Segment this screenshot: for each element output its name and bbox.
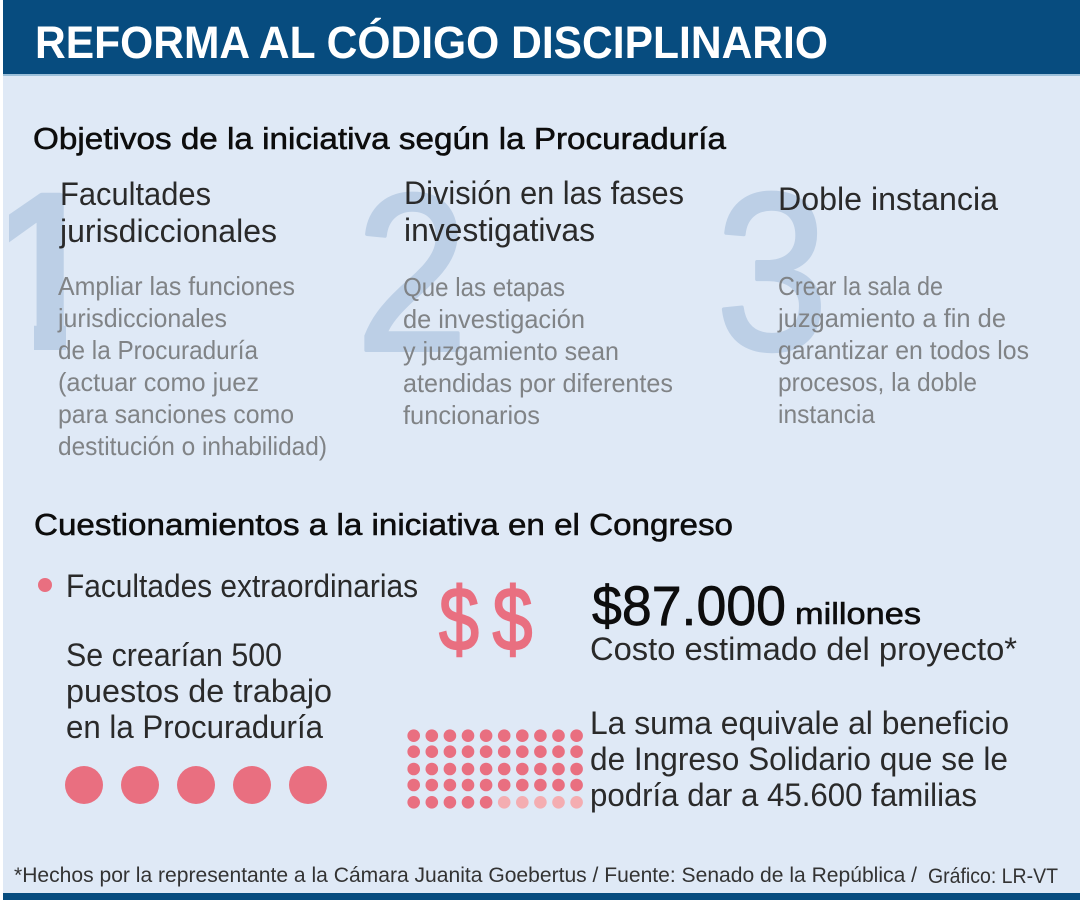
title banner [3,0,1080,76]
objetivo 1 title: jurisdiccionales [59,213,277,249]
objetivo 3 description: procesos, la doble [778,367,977,397]
objetivo 2 description: de investigación [403,304,585,334]
ingreso solidario text: podría dar a 45.600 familias [590,777,977,813]
facultades text: Se crearían 500 [66,637,282,673]
objetivo 2 description [403,272,673,430]
panel: objetivo 3 [716,147,1029,429]
objetivo 3 description: garantizar en todos los [778,335,1029,365]
facultades text: en la Procuraduría [66,709,323,745]
objetivo 3 title: Doble instancia [778,181,998,217]
panel: objetivo 2 [356,148,684,430]
icon: dollar signs [439,570,532,670]
objetivo 1 description: de la Procuraduría [58,335,259,365]
heading: cuestionamientos: Cuestionamientos a la iniciativa en el Congreso [34,507,733,542]
objetivo 1 description: Ampliar las funciones [58,271,295,301]
objetivo 3 description [777,271,1029,429]
facultades text [66,637,332,745]
objetivo 2 description: atendidas por diferentes [403,368,673,398]
cost figure: $87.000 [592,574,786,637]
objetivo 3 description: juzgamiento a fin de [777,303,1006,333]
facultades heading: Facultades extraordinarias [66,568,418,604]
number 2: 2 [356,148,468,398]
five circles [65,766,327,804]
title banner: REFORMA AL CÓDIGO DISCIPLINARIO [35,17,828,68]
dot grid: 45 of 50 [407,729,583,809]
objetivo 1 description: destitución o inhabilidad) [58,431,327,461]
objetivo 1 description: (actuar como juez [58,367,259,397]
objetivo 2 description: funcionarios [403,400,540,430]
bottom bar [3,893,1080,900]
objetivo 2 description: y juzgamiento sean [403,336,619,366]
number 3: 3 [716,147,828,397]
objetivo 2 title [404,175,684,248]
objetivo 2 title: investigativas [404,212,595,248]
footer source note: Gráfico: LR-VT [928,865,1058,888]
heading: objetivos: Objetivos de la iniciativa según la Procuraduría [33,121,727,156]
objetivo 2 description: Que las etapas [403,272,565,302]
objetivo 1 title: Facultades [60,176,211,212]
cost figure: millones [795,596,921,631]
panel: objetivo 1 [9,182,326,460]
ingreso solidario text [590,705,1009,813]
objetivo 1 description: para sanciones como [58,399,294,429]
facultades text: puestos de trabajo [66,673,332,709]
icon: dollar signs: $ [492,570,532,670]
footer source note: *Hechos por la representante a la Cámara Juanita Goebertus / Fuente: Senado de la República / [14,864,917,887]
cost figure [592,574,921,637]
icon: dollar signs: $ [439,570,479,670]
objetivo 1 description: jurisdiccionales [57,303,227,333]
ingreso solidario text: de Ingreso Solidario que se le [590,741,1008,777]
objetivo 2 title: División en las fases [404,175,684,211]
cost caption: Costo estimado del proyecto* [590,631,1017,667]
ingreso solidario text: La suma equivale al beneficio [590,705,1009,741]
objetivo 3 description: instancia [778,399,876,429]
bullet [38,578,52,592]
objetivo 1 title [59,176,277,249]
panel: facultades extraordinarias [38,568,418,804]
objetivo 3 description: Crear la sala de [778,271,943,301]
objetivo 1 description [57,271,327,461]
